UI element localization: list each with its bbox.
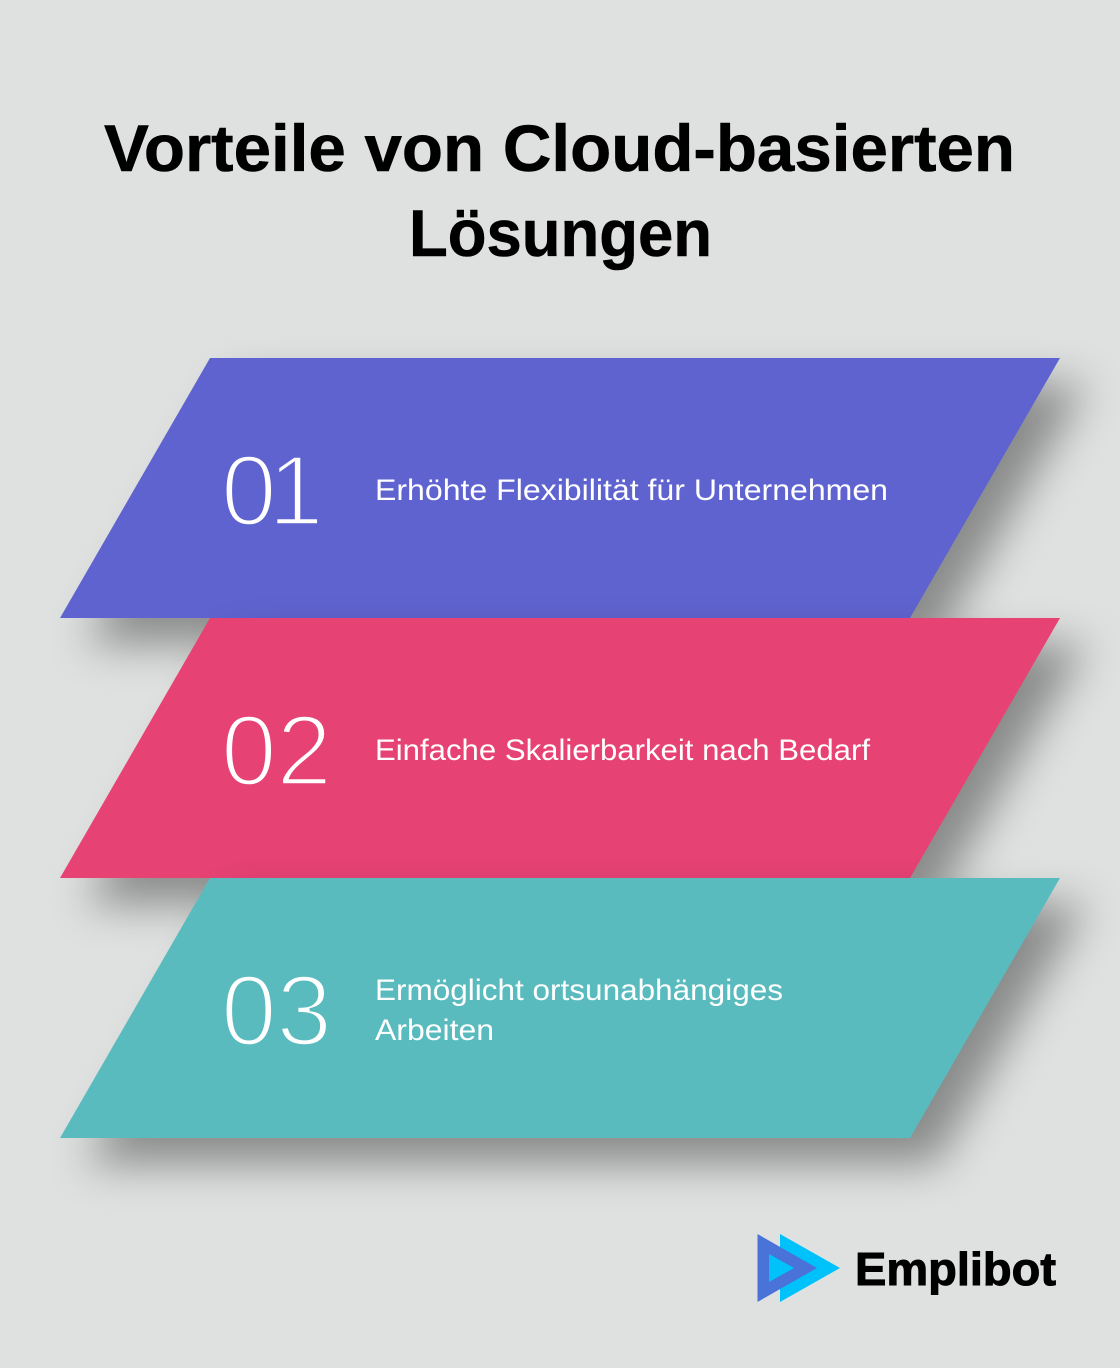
- panel: 01 Flexibilität: [60, 358, 1060, 618]
- panel: 03 ortsunabhängig: [60, 878, 1060, 1138]
- number 01: 01: [221, 435, 324, 547]
- number 02: 02: [221, 695, 332, 807]
- title: Lösungen: [409, 196, 712, 270]
- title: [104, 111, 1015, 270]
- text: Ermöglicht ortsunabhängiges Arbeiten: Arbeiten: [375, 1014, 494, 1047]
- text: Ermöglicht ortsunabhängiges Arbeiten: Ermöglicht ortsunabhängiges: [375, 974, 783, 1007]
- panel shape: pink parallelogram: [60, 618, 1060, 878]
- logo: Emplibot: [758, 1234, 1056, 1302]
- title: Vorteile von Cloud-basierten: [104, 111, 1015, 185]
- text: Ermöglicht ortsunabhängiges Arbeiten: [375, 974, 783, 1047]
- panel shape: purple parallelogram: [60, 358, 1060, 618]
- icon: play triangles: [758, 1234, 840, 1302]
- wordmark: Emplibot: [855, 1243, 1056, 1295]
- panel: 02 Skalierbarkeit: [60, 618, 1060, 878]
- number 03: 03: [221, 955, 332, 1067]
- text: Erhöhte Flexibilität: Erhöhte Flexibilität für Unternehmen: [375, 474, 888, 507]
- panel shape: teal parallelogram: [60, 878, 1060, 1138]
- text: Einfache Skalierbarkeit: Einfache Skalierbarkeit nach Bedarf: [375, 734, 871, 767]
